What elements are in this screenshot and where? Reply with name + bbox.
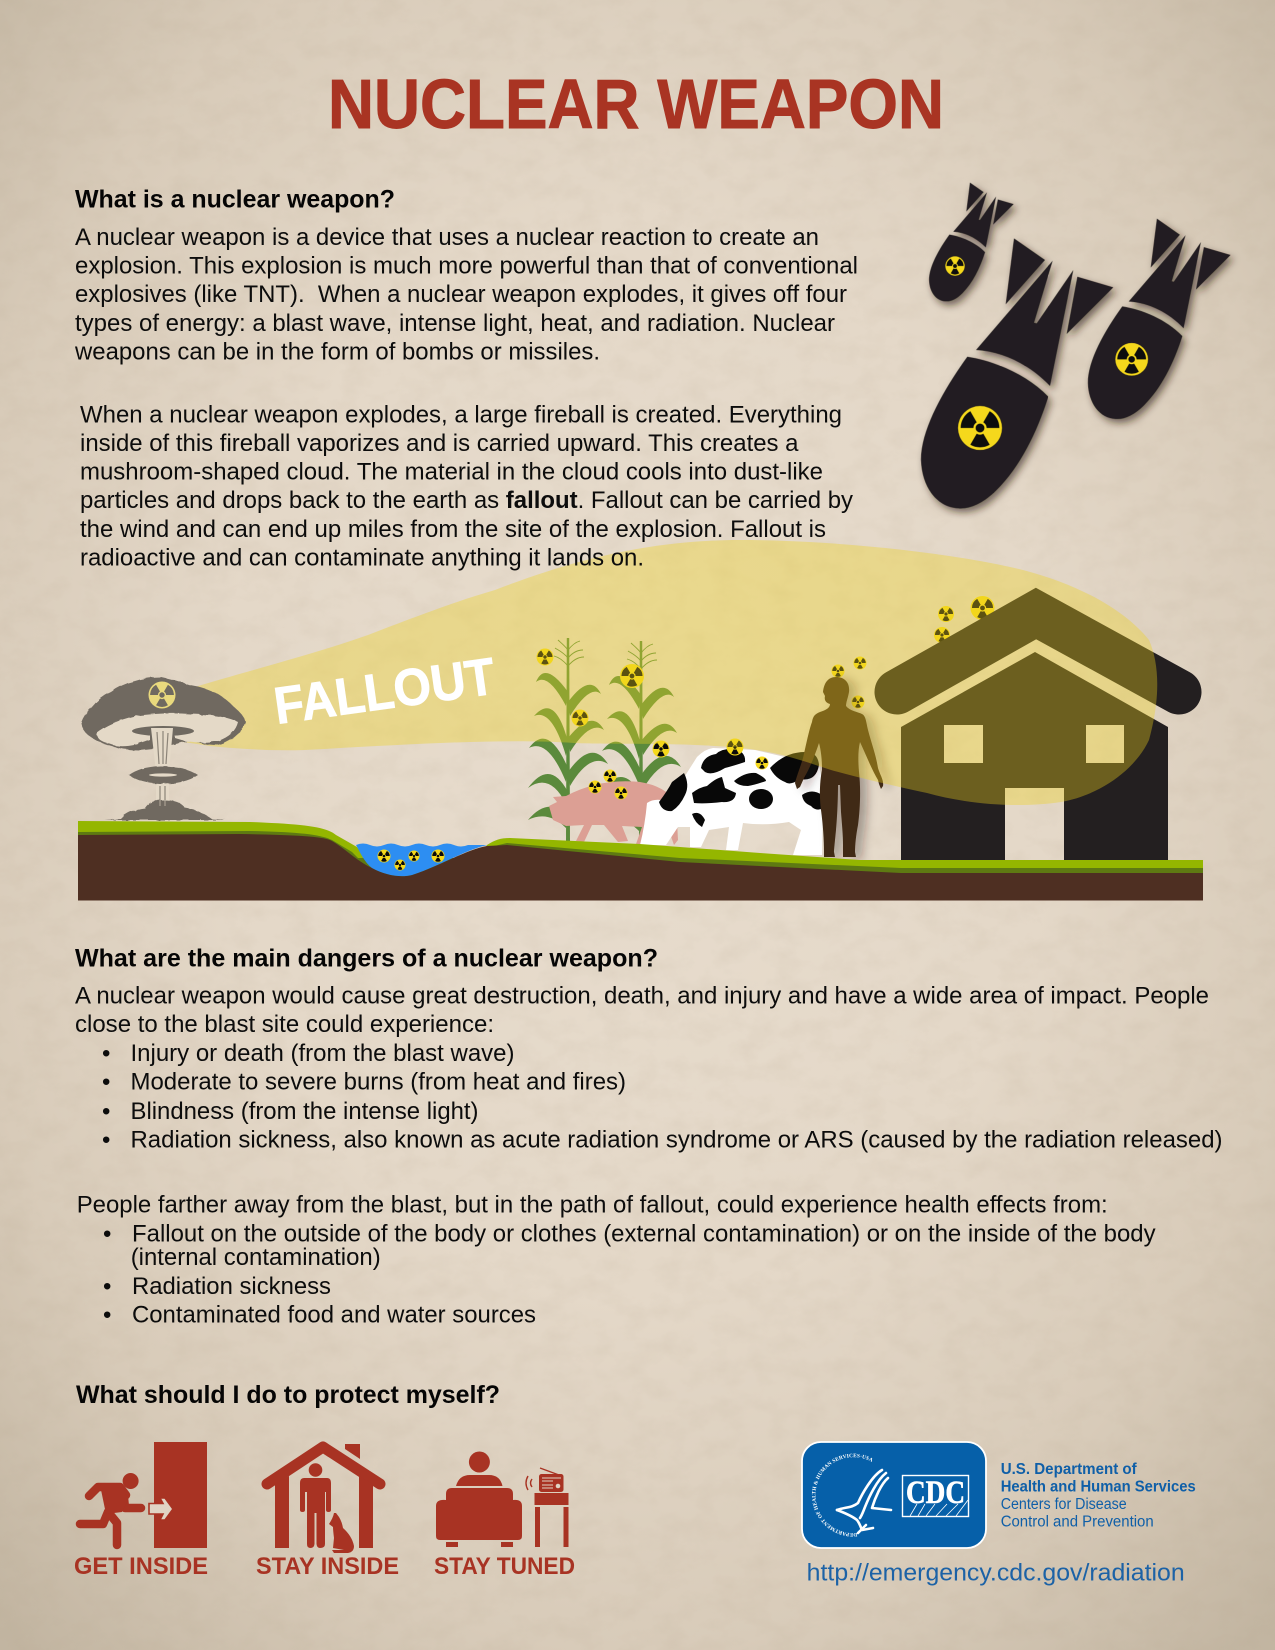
heading: protect myself: What should I do to protect myself? <box>76 1381 500 1409</box>
text block: definition: explosives (like TNT). When a nuclear weapon explodes, it gives off four <box>75 281 847 308</box>
text block: agency name: U.S. Department of <box>1001 1461 1138 1478</box>
icon: small bomb <box>929 183 1014 301</box>
text block: fireball and fallout: particles and drops back to the earth as fallout. Fallout can be carried by <box>80 487 853 514</box>
text block: fireball and fallout: the wind and can end up miles from the site of the explosion. Fallout is <box>80 516 826 543</box>
text block: fireball and fallout: mushroom-shaped cloud. The material in the cloud cools into dust-like <box>80 458 823 486</box>
label: stay tuned: STAY TUNED <box>434 1554 575 1580</box>
ground with water and grass <box>78 821 1203 900</box>
list: close to blast: Radiation sickness, also known as acute radiation syndrome or ARS (caused by the radiation released) <box>130 1126 1222 1154</box>
fallout scene illustration <box>78 540 1203 900</box>
list: path of fallout: Fallout on the outside of the body or clothes (external contamination) or on the inside of the body <box>132 1221 1156 1248</box>
text block: definition: types of energy: a blast wave, intense light, heat, and radiation. Nuclear <box>75 310 835 337</box>
list: close to blast <box>102 1040 1222 1154</box>
list: path of fallout: • <box>103 1302 111 1329</box>
icon: stay tuned <box>436 1452 568 1547</box>
text block: definition: A nuclear weapon is a device that uses a nuclear reaction to create an <box>75 224 819 251</box>
text block: definition <box>74 224 858 366</box>
list: path of fallout: Contaminated food and water sources <box>132 1302 536 1329</box>
corn plants <box>528 638 681 845</box>
icon: stay inside <box>267 1444 380 1553</box>
heading: what is a nuclear weapon: What is a nuclear weapon? <box>75 185 395 213</box>
seal ring text <box>815 1457 881 1533</box>
list: path of fallout: (internal contamination) <box>131 1244 381 1271</box>
FALLOUT label: FALLOUT <box>271 648 499 736</box>
list: close to blast: • <box>102 1068 110 1096</box>
section: main dangers <box>75 944 1222 1329</box>
text block: farther away: People farther away from the blast, but in the path of fallout, could experience health effects from: <box>77 1192 1108 1219</box>
text block: fireball and fallout: radioactive and can contaminate anything it lands on. <box>80 544 644 571</box>
section: what is a nuclear weapon <box>74 185 858 571</box>
label: get inside: GET INSIDE <box>74 1554 208 1580</box>
text block: agency name <box>1001 1461 1196 1531</box>
list: close to blast: Injury or death (from the blast wave) <box>130 1040 514 1067</box>
text block: fireball and fallout: inside of this fireball vaporizes and is carried upward. This creates a <box>80 430 799 457</box>
list: path of fallout <box>103 1221 1156 1329</box>
illustration: falling bombs <box>921 183 1231 508</box>
website address: http://emergency.cdc.gov/radiation <box>807 1560 1185 1587</box>
list: close to blast: Moderate to severe burns (from heat and fires) <box>130 1068 626 1096</box>
text block: dangers intro: A nuclear weapon would cause great destruction, death, and injury and have a wide area of impact. People <box>75 982 1209 1009</box>
text block: dangers intro <box>75 982 1209 1038</box>
house <box>897 614 1179 860</box>
person silhouette <box>795 677 883 857</box>
heading: main dangers: What are the main dangers of a nuclear weapon? <box>75 944 658 972</box>
mushroom cloud <box>81 677 246 820</box>
section: protect myself <box>74 1381 575 1580</box>
icon: medium bomb <box>1088 219 1231 419</box>
list: path of fallout: • <box>103 1273 111 1300</box>
text block: definition: explosion. This explosion is much more powerful than that of conventional <box>75 253 858 280</box>
pig <box>549 781 678 845</box>
text block: agency name: Centers for Disease <box>1001 1496 1127 1513</box>
label: stay inside: STAY INSIDE <box>256 1554 399 1580</box>
logo: HHS and CDC badge: DEPARTMENT OF HEALTH & HUMAN SERVICES·USA <box>812 1454 872 1537</box>
fallout plume <box>170 540 1157 805</box>
icon: get inside <box>80 1442 207 1548</box>
list: close to blast: • <box>102 1040 110 1067</box>
text block: fireball and fallout: When a nuclear weapon explodes, a large fireball is created. Everything <box>80 402 842 428</box>
title: NUCLEAR WEAPON <box>328 65 944 143</box>
list: close to blast: • <box>102 1126 110 1154</box>
icon: radiation on cloud <box>148 682 176 708</box>
text block: dangers intro: close to the blast site could experience: <box>75 1011 494 1038</box>
text block: agency name: Health and Human Services <box>1001 1479 1196 1496</box>
list: close to blast: • <box>102 1098 110 1125</box>
CDC box: CDC <box>906 1475 965 1511</box>
list: close to blast: Blindness (from the intense light) <box>130 1098 478 1125</box>
list: path of fallout: • <box>103 1221 111 1248</box>
text block: fireball and fallout <box>80 402 853 571</box>
cow <box>640 748 824 855</box>
logo: HHS and CDC badge <box>801 1441 987 1549</box>
text block: agency name: Control and Prevention <box>1001 1514 1154 1531</box>
list: path of fallout: Radiation sickness <box>132 1273 331 1300</box>
icon: HHS eagle <box>837 1470 891 1533</box>
text block: definition: weapons can be in the form of bombs or missiles. <box>74 339 600 366</box>
radiation particles on crops, animals, person and house <box>536 596 994 800</box>
icon: large bomb <box>921 238 1113 508</box>
